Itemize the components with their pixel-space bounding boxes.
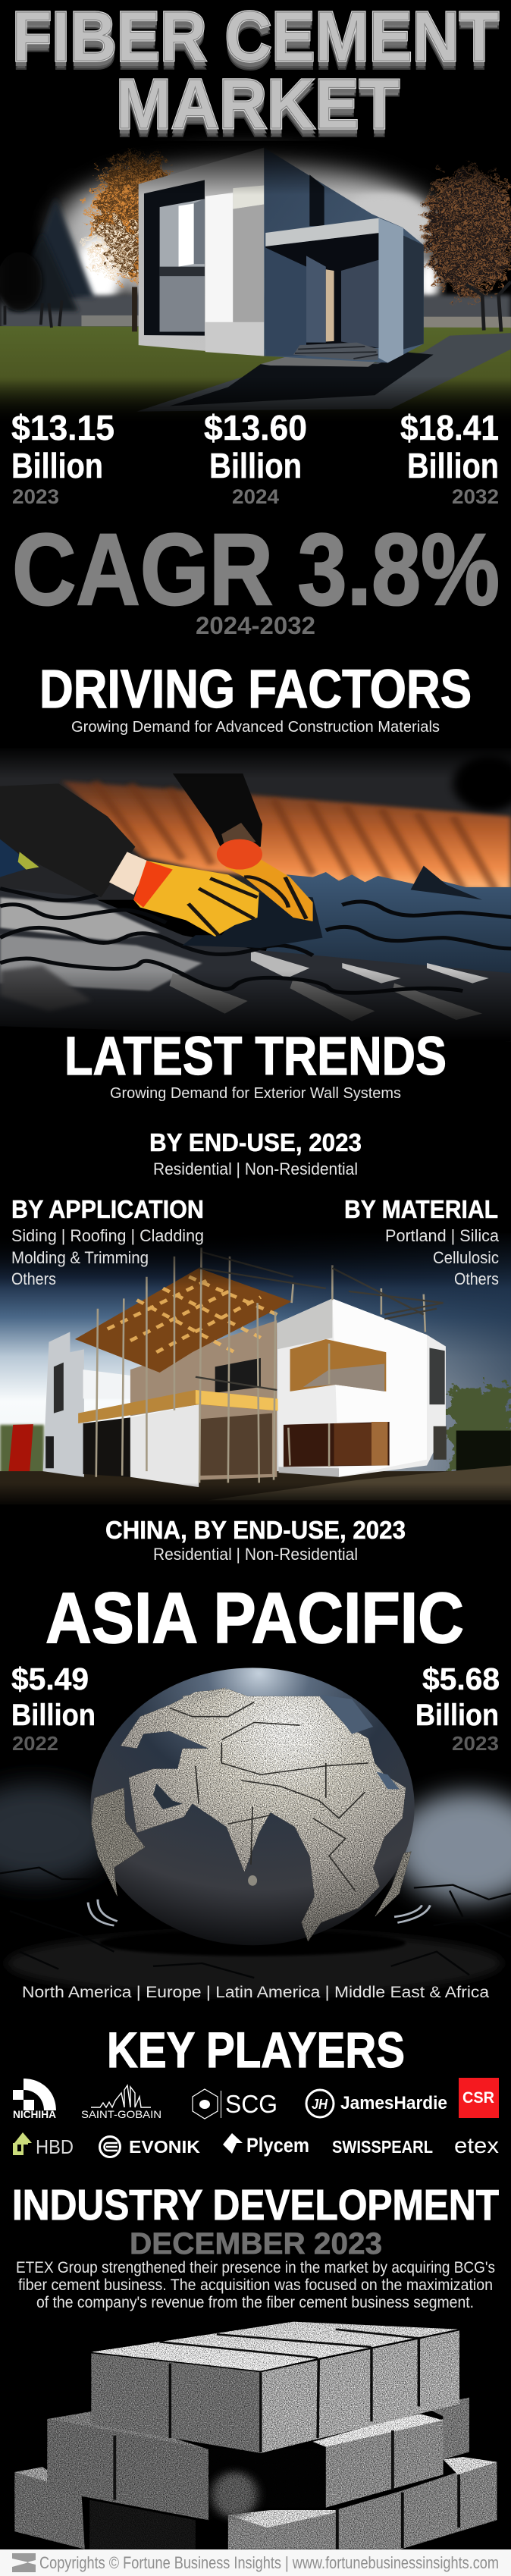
segment: by end-use: BY END-USE, 2023 xyxy=(149,1128,362,1156)
top fade xyxy=(0,1230,511,1288)
value 2032: 2032 xyxy=(452,485,499,508)
trend text: Growing Demand for Exterior Wall Systems xyxy=(110,1085,401,1102)
side fade xyxy=(0,152,36,303)
interior xyxy=(130,1320,277,1480)
segment: by end-use: Residential | Non-Residential xyxy=(153,1159,358,1178)
segment: by material: Portland | Silica xyxy=(385,1226,500,1245)
market values xyxy=(11,408,499,508)
lit tile rows xyxy=(0,887,511,1041)
regional value 2023 xyxy=(415,1661,500,1755)
driving factor text: Growing Demand for Advanced Construction Materials xyxy=(71,719,440,736)
logo: Nichiha: NICHIHA xyxy=(13,2108,56,2120)
segment: china by end-use: Residential | Non-Residential xyxy=(153,1545,358,1564)
side wall xyxy=(264,148,424,362)
timber ceiling xyxy=(75,1268,292,1373)
regional value 2022: $5.49 xyxy=(11,1661,89,1696)
sky darkening right xyxy=(0,1233,511,1480)
development text: of the company's revenue from the fiber cement business segment. xyxy=(36,2294,474,2311)
beam xyxy=(265,218,380,246)
regional value 2022: 2022 xyxy=(12,1732,58,1755)
regional value 2023: Billion xyxy=(415,1699,499,1732)
title: MARKET xyxy=(116,69,400,148)
red panel xyxy=(8,1424,33,1477)
ground xyxy=(0,1784,511,1995)
top tier xyxy=(91,2322,459,2453)
development text xyxy=(16,2259,495,2311)
logo: Saint-Gobain xyxy=(81,2085,161,2120)
logo: SCG: SCG xyxy=(225,2090,277,2118)
window xyxy=(144,180,205,336)
logo: SCG xyxy=(193,2089,277,2119)
value 2032: $18.41 xyxy=(400,408,499,447)
borders xyxy=(169,1702,368,1890)
logo: Plycem: Plycem xyxy=(246,2134,309,2157)
value 2023: 2023 xyxy=(12,485,59,508)
left arm xyxy=(0,783,135,897)
bricks image: stacked cement blocks xyxy=(14,2322,497,2549)
balcony xyxy=(78,1390,290,1423)
logo: CSR: CSR xyxy=(462,2089,494,2107)
right arm xyxy=(173,773,262,849)
entrance xyxy=(265,233,378,350)
sky glow xyxy=(0,154,511,331)
value 2023 xyxy=(11,408,114,508)
bottom fade xyxy=(0,376,511,425)
CAGR: 2024-2032 xyxy=(196,612,315,639)
seas xyxy=(153,1695,400,1809)
segment: by material xyxy=(344,1195,500,1288)
segment: china by end-use: CHINA, BY END-USE, 2023 xyxy=(105,1516,406,1544)
value 2024: $13.60 xyxy=(204,408,307,447)
wrist xyxy=(109,852,150,895)
segment: by end-use xyxy=(149,1128,362,1178)
land xyxy=(91,1687,411,1941)
regional value 2022 xyxy=(11,1661,96,1755)
key player logos xyxy=(13,2078,500,2158)
segment: china by end-use xyxy=(105,1516,406,1564)
logo: James Hardie: JH xyxy=(312,2097,328,2112)
title xyxy=(12,0,499,152)
column xyxy=(378,218,403,362)
right block xyxy=(277,1298,446,1477)
regions: North America | Europe | Latin America | Middle East & Africa xyxy=(22,1984,489,2001)
logo: CSR xyxy=(459,2078,499,2118)
heading: key players: KEY PLAYERS xyxy=(107,2022,405,2078)
segment: by application xyxy=(11,1195,204,1288)
sky xyxy=(0,1233,511,1480)
logo: James Hardie xyxy=(306,2090,447,2117)
path and wet ground xyxy=(137,333,511,412)
blue roof xyxy=(261,872,511,1006)
footer xyxy=(0,2549,511,2576)
value 2024: Billion xyxy=(209,446,302,485)
logo: Saint-Gobain: SAINT-GOBAIN xyxy=(81,2108,161,2120)
value 2032: Billion xyxy=(407,446,499,485)
logo: James Hardie: JamesHardie xyxy=(340,2093,447,2113)
title: MARKET xyxy=(116,64,400,143)
logo: HBD: HBD xyxy=(36,2135,74,2158)
ground xyxy=(0,1471,511,1504)
island xyxy=(248,1875,257,1886)
regional value 2023: $5.68 xyxy=(422,1661,500,1696)
title: MARKET xyxy=(116,64,400,143)
sphere xyxy=(90,1668,415,1945)
segment: by application: Siding | Roofing | Cladding xyxy=(11,1226,204,1245)
logo: HBD xyxy=(13,2132,74,2158)
logo: Swisspearl: SWISSPEARL xyxy=(332,2137,433,2157)
segment: by application: Molding & Trimming xyxy=(11,1248,149,1267)
top fade xyxy=(0,745,511,779)
segment: by material: BY MATERIAL xyxy=(344,1195,498,1223)
value 2032 xyxy=(400,408,499,508)
second tier xyxy=(47,2398,469,2520)
logo: Nichiha xyxy=(13,2079,56,2120)
trees xyxy=(0,1387,511,1474)
steps xyxy=(293,343,378,360)
segment: by material: Cellulosic xyxy=(433,1248,499,1267)
value 2024 xyxy=(204,408,307,508)
footer logo xyxy=(12,2553,36,2572)
building xyxy=(43,1247,447,1487)
bottom fade xyxy=(0,971,511,1041)
logo: Etex: etex xyxy=(454,2134,500,2158)
value 2023: $13.15 xyxy=(11,408,114,447)
backdrop xyxy=(0,748,511,900)
lower tier xyxy=(14,2457,497,2549)
front wall xyxy=(139,148,264,356)
logo: Evonik: EVONIK xyxy=(129,2137,200,2157)
regional value 2023: 2023 xyxy=(452,1732,499,1755)
hero image: fiber cement house xyxy=(0,141,511,425)
construction image: building under construction xyxy=(0,1230,511,1509)
title: MARKET xyxy=(116,73,400,152)
globe image: cement globe showing Asia xyxy=(0,1668,511,1995)
gloves xyxy=(133,839,313,937)
heading: asia pacific: ASIA PACIFIC xyxy=(45,1578,464,1658)
logo: Plycem xyxy=(223,2133,309,2157)
regional value 2022: Billion xyxy=(11,1699,96,1732)
vent xyxy=(183,893,323,948)
segment: by application: Others xyxy=(11,1269,56,1288)
top fade xyxy=(0,141,511,195)
trees xyxy=(0,149,511,331)
grass xyxy=(0,326,511,425)
logo: Evonik xyxy=(100,2137,200,2157)
rings xyxy=(88,1900,430,1925)
left block xyxy=(43,1332,84,1477)
heading: latest trends: LATEST TRENDS xyxy=(64,1027,447,1087)
segment: by material: Others xyxy=(454,1269,499,1288)
roof image: worker installing tiles xyxy=(0,745,511,1041)
lower front block xyxy=(130,1404,199,1487)
value 2023: Billion xyxy=(11,446,103,485)
segment: by application: BY APPLICATION xyxy=(11,1195,204,1223)
development date: DECEMBER 2023 xyxy=(130,2227,382,2261)
value 2024: 2024 xyxy=(232,485,279,508)
scaffolding xyxy=(96,1247,425,1483)
shadow xyxy=(99,1930,406,1956)
house xyxy=(139,148,424,362)
bottom fade xyxy=(0,1483,511,1509)
